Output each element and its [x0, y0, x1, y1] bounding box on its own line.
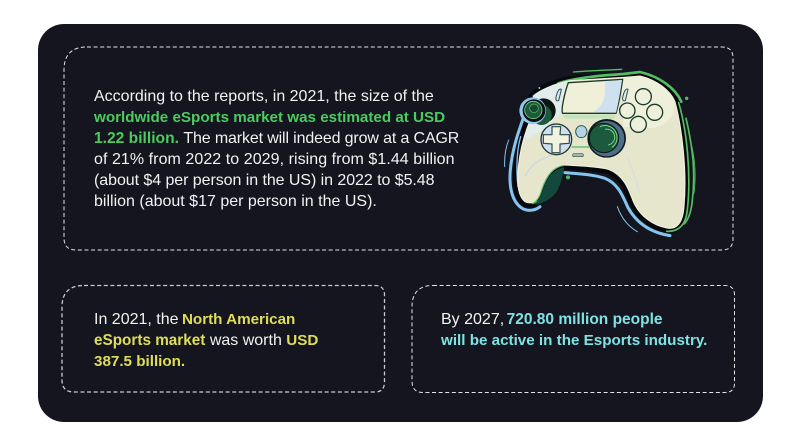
controller cream body — [518, 76, 685, 228]
right thumbstick — [587, 119, 626, 158]
center green line and speaker — [572, 145, 590, 149]
outer green strokes — [533, 69, 695, 231]
left thumbstick — [519, 97, 556, 125]
text block: North American market: In 2021, the North American — [94, 311, 295, 328]
text block: worldwide market size: (about $4 per person in the US) in 2022 to $5.48 — [94, 172, 434, 189]
touchpad — [562, 79, 623, 113]
body shading arcs — [525, 155, 553, 177]
text block: North American market: 387.5 billion. — [94, 353, 185, 370]
accent dots — [685, 97, 688, 100]
text block: North American market: eSports market was worth USD — [94, 332, 318, 349]
text block: worldwide market size: 1.22 billion. The market will indeed grow at a CAGR — [94, 130, 459, 147]
left grip panel — [534, 167, 564, 205]
controller black silhouette — [518, 76, 685, 228]
small slot buttons — [556, 89, 561, 101]
icon: game controller — [504, 68, 696, 238]
text block: active people: By 2027, 720.80 million people — [441, 311, 663, 328]
text block: worldwide market size: of 21% from 2022 to 2029, rising from $1.44 billion — [94, 151, 455, 168]
face buttons — [620, 89, 663, 132]
text block: worldwide market size: According to the reports, in 2021, the size of the — [94, 88, 434, 105]
text block: active people: will be active in the Esports industry. — [441, 332, 707, 349]
upper body highlight — [525, 82, 569, 140]
text block: active people — [441, 311, 707, 349]
text block: worldwide market size: worldwide eSports market was estimated at USD — [94, 109, 445, 126]
outer blue strokes — [505, 85, 670, 236]
text block: worldwide market size — [94, 88, 459, 210]
d-pad — [541, 124, 572, 155]
text block: worldwide market size: billion (about $17 per person in the US). — [94, 193, 377, 210]
center button — [576, 126, 587, 138]
text block: North American market — [94, 311, 318, 370]
